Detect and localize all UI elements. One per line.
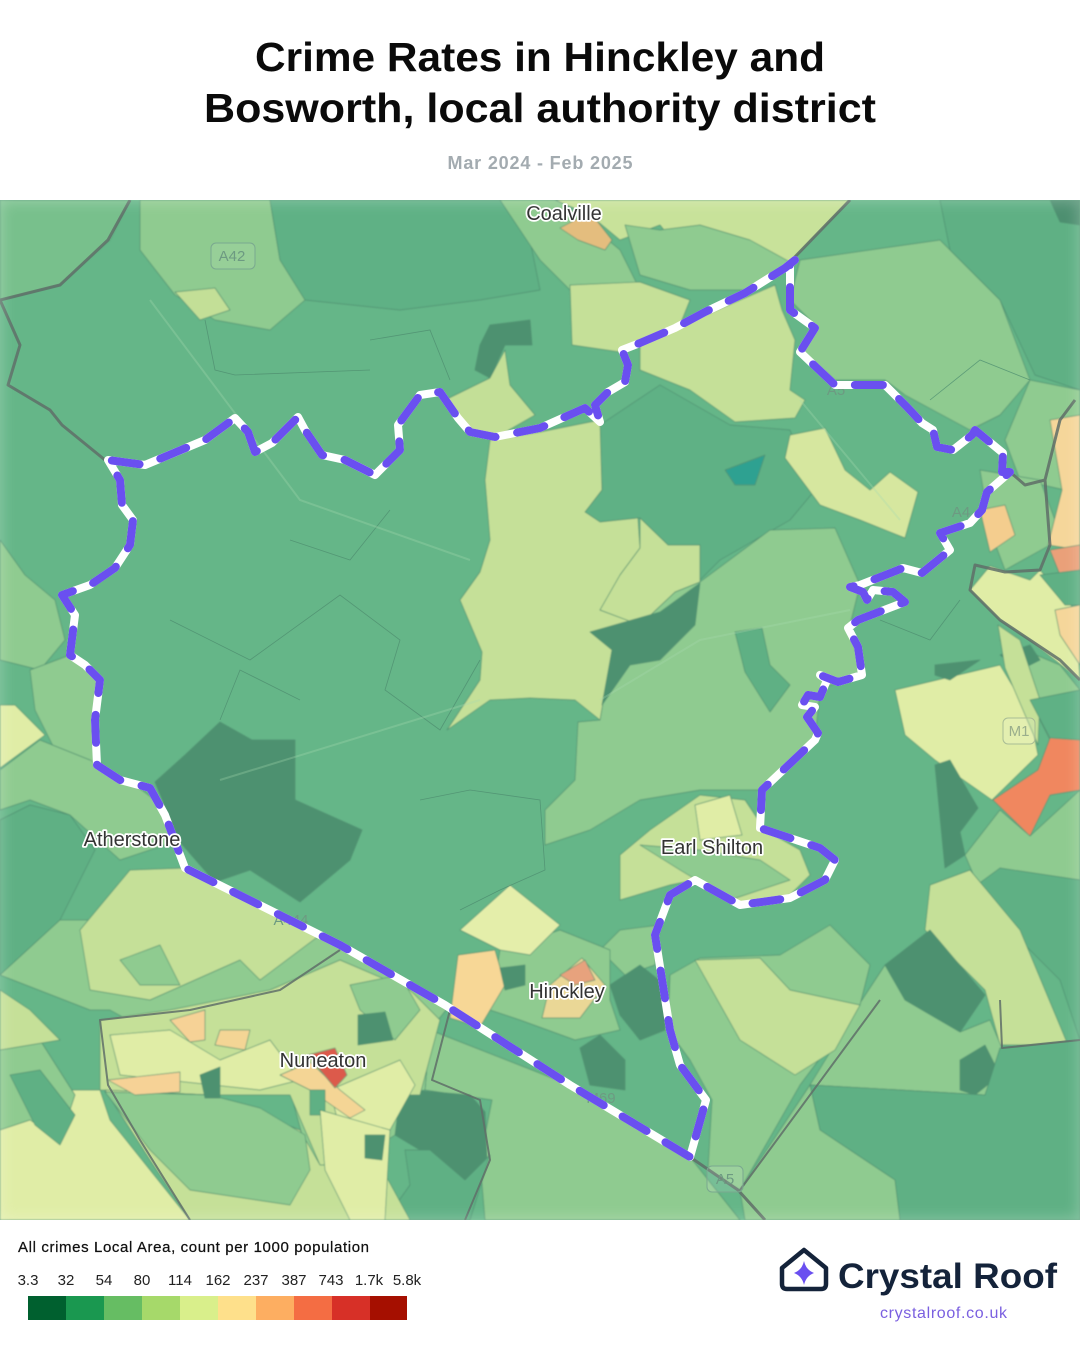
legend values: 32 <box>58 1272 74 1289</box>
legend values: 743 <box>318 1272 344 1289</box>
legend title: All crimes Local Area, count per 1000 population <box>18 1239 369 1256</box>
dark patch centre <box>590 583 700 705</box>
legend values: 54 <box>96 1272 112 1289</box>
legend values: 237 <box>243 1272 269 1289</box>
dark patch near Atherstone <box>155 722 362 902</box>
wordmark: Crystal Roof <box>838 1257 1057 1296</box>
legend values: 80 <box>134 1272 150 1289</box>
legend values: 162 <box>205 1272 231 1289</box>
legend values: 5.8k <box>393 1272 422 1289</box>
map edge fade <box>0 196 1080 1224</box>
legend values: 3.3 <box>18 1272 38 1289</box>
local authority boundaries <box>0 200 1080 1220</box>
choropleth areas <box>0 200 1080 1220</box>
logo: Crystal Roof <box>782 1250 1057 1322</box>
place labels: Atherstone <box>84 829 180 851</box>
thin ward lines <box>170 320 1030 910</box>
place labels: Coalville <box>526 203 602 225</box>
roads <box>150 300 900 780</box>
place labels: Nuneaton <box>280 1050 366 1072</box>
road labels: A444 <box>273 912 309 929</box>
road labels: A42 <box>219 248 245 265</box>
map <box>0 196 1080 1224</box>
icon: house with star <box>782 1250 826 1289</box>
place labels: Earl Shilton <box>661 837 763 859</box>
subtitle: date range: Mar 2024 - Feb 2025 <box>448 153 632 173</box>
website: crystalroof.co.uk <box>880 1305 1008 1322</box>
title <box>204 34 876 131</box>
legend values <box>18 1272 422 1289</box>
legend colour scale <box>28 1296 407 1320</box>
place labels <box>84 203 763 1072</box>
road labels: M69 <box>586 1090 616 1107</box>
road labels: A5 <box>716 1171 734 1188</box>
title: Crime Rates in Hinckley and <box>255 34 825 80</box>
legend <box>18 1239 422 1320</box>
legend values: 1.7k <box>355 1272 384 1289</box>
road labels: A5 <box>827 382 845 399</box>
road labels <box>211 243 1035 1192</box>
title: Bosworth, local authority district <box>204 85 876 131</box>
road labels: A4 <box>952 504 970 521</box>
district boundary <box>62 260 1010 1157</box>
place labels: Hinckley <box>529 981 605 1003</box>
road labels: M1 <box>1009 723 1029 740</box>
legend values: 387 <box>281 1272 307 1289</box>
legend values: 114 <box>168 1272 192 1289</box>
